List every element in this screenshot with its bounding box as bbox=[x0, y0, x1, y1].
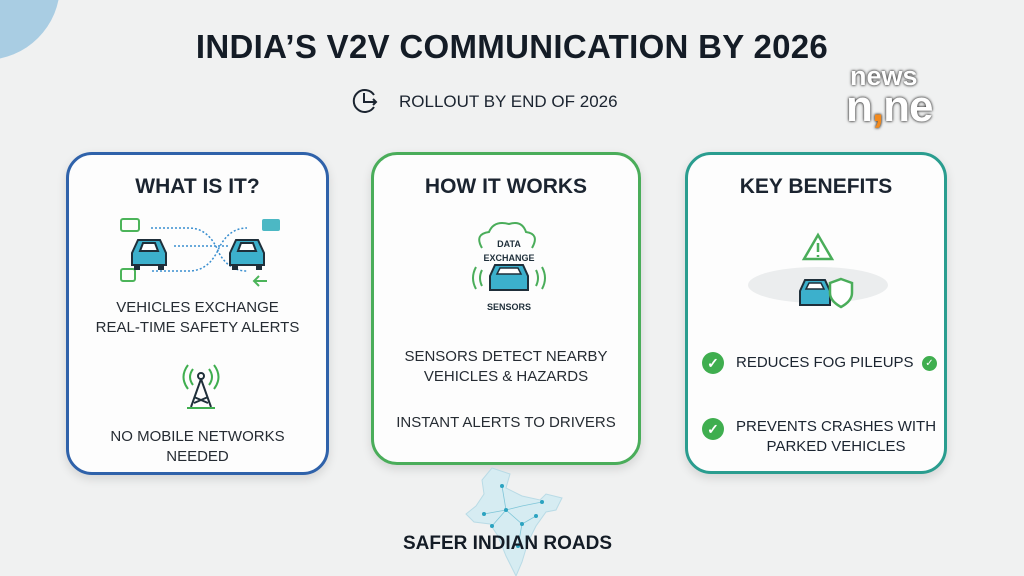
heading: KEY BENEFITS bbox=[740, 175, 892, 198]
text: instant alerts: INSTANT ALERTS TO DRIVERS bbox=[396, 414, 616, 431]
benefit: fog pileups bbox=[702, 352, 937, 374]
text: sensors detect: VEHICLES & HAZARDS bbox=[424, 368, 588, 385]
icon: warning car shield bbox=[748, 232, 888, 308]
decorative corner circle bbox=[0, 0, 60, 60]
text: no mobile networks bbox=[110, 428, 285, 465]
icon: tower bbox=[182, 364, 220, 409]
panel: key benefits bbox=[685, 152, 947, 474]
text: no mobile networks: NEEDED bbox=[166, 448, 229, 465]
logo: news nine bbox=[846, 61, 934, 131]
benefit: parked vehicles: PREVENTS CRASHES WITH bbox=[736, 418, 936, 435]
icon: data exchange car sensors: DATA bbox=[497, 239, 521, 249]
map: India network bbox=[466, 468, 563, 576]
panel: what is it bbox=[66, 152, 329, 475]
subtitle with clock icon bbox=[352, 89, 618, 113]
benefit: fog pileups: ✓ bbox=[707, 355, 719, 371]
text: vehicles exchange: VEHICLES EXCHANGE bbox=[116, 299, 279, 316]
heading: HOW IT WORKS bbox=[425, 175, 587, 198]
panel: how it works bbox=[371, 152, 641, 465]
benefit: fog pileups: ✓ bbox=[925, 358, 934, 369]
benefit: parked vehicles bbox=[702, 418, 936, 455]
heading: WHAT IS IT? bbox=[135, 175, 260, 198]
subtitle with clock icon: ROLLOUT BY END OF 2026 bbox=[399, 92, 618, 111]
logo: news nine: n,ne bbox=[846, 82, 932, 131]
icon: data exchange car sensors: SENSORS bbox=[487, 302, 531, 312]
text: sensors detect: SENSORS DETECT NEARBY bbox=[404, 348, 608, 365]
icon: clock bbox=[352, 89, 378, 113]
text: sensors detect bbox=[404, 348, 608, 385]
icon: data exchange car sensors bbox=[472, 222, 546, 312]
icon: cars exchanging bbox=[120, 218, 280, 287]
benefit: parked vehicles: PARKED VEHICLES bbox=[767, 438, 905, 455]
footer text: SAFER INDIAN ROADS bbox=[403, 533, 612, 554]
benefit: parked vehicles: ✓ bbox=[707, 421, 719, 437]
text: vehicles exchange: REAL-TIME SAFETY ALERTS bbox=[96, 319, 299, 336]
benefit: fog pileups: REDUCES FOG PILEUPS bbox=[736, 354, 914, 371]
icon: data exchange car sensors: EXCHANGE bbox=[483, 253, 535, 263]
text: no mobile networks: NO MOBILE NETWORKS bbox=[110, 428, 285, 445]
title: INDIA’S V2V COMMUNICATION BY 2026 bbox=[196, 28, 828, 65]
text: vehicles exchange bbox=[96, 299, 299, 336]
logo: news nine: news bbox=[850, 61, 918, 91]
